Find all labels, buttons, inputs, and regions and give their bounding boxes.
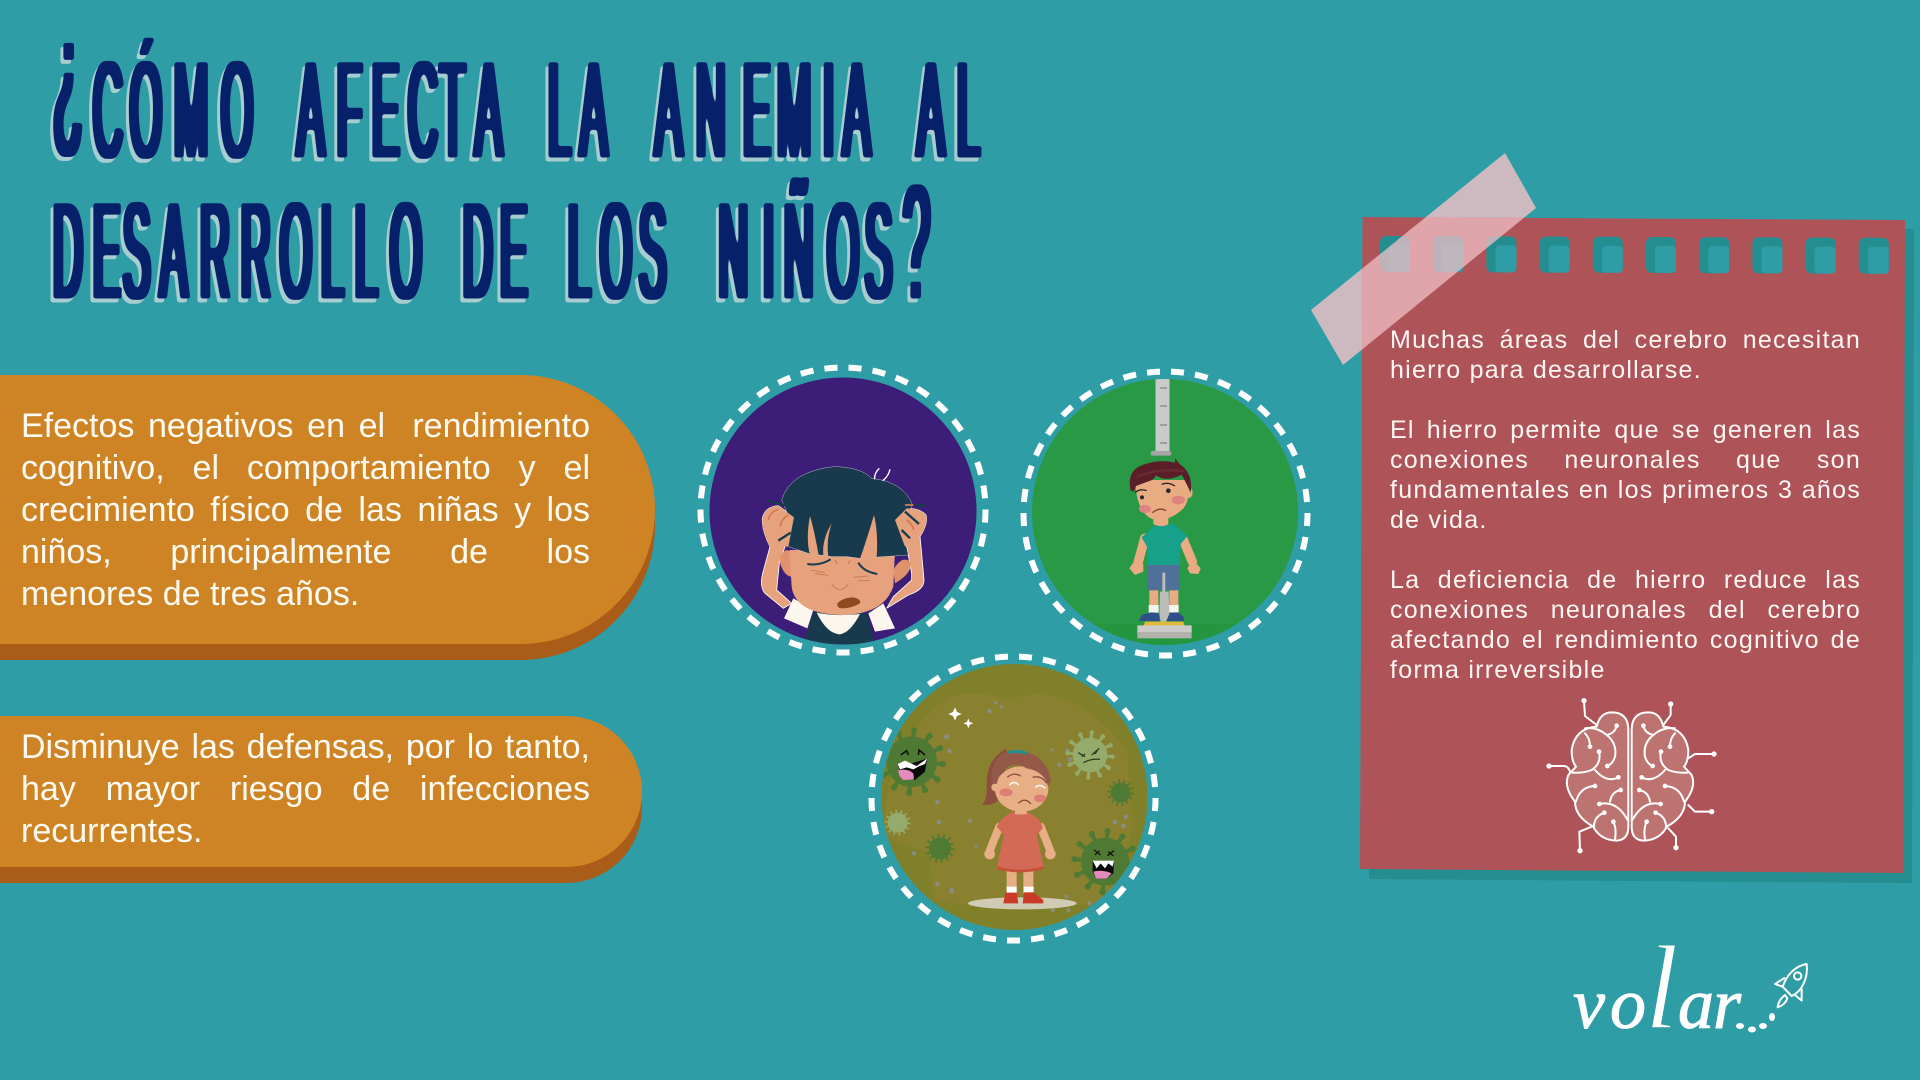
mouth bbox=[837, 597, 860, 608]
height ruler bbox=[1156, 375, 1170, 455]
text: nota bbox=[1390, 326, 1861, 684]
face bbox=[789, 550, 895, 615]
text: nota: fundamentales en los primeros 3 años bbox=[1390, 476, 1861, 504]
shorts bbox=[1147, 563, 1180, 590]
eyes bbox=[1009, 782, 1045, 788]
text: defensas: recurrentes. bbox=[21, 812, 202, 850]
tape: over paper bbox=[1311, 153, 1536, 365]
fringe bbox=[992, 751, 1051, 787]
panel: defensas bbox=[0, 716, 642, 867]
icon: cerebro bbox=[1546, 698, 1717, 854]
text: nota: El hierro permite que se generen las bbox=[1390, 416, 1861, 444]
left arm bbox=[761, 506, 793, 608]
neck bbox=[1015, 811, 1027, 814]
text: defensas: hay mayor riesgo de infecciones bbox=[21, 770, 590, 808]
shoes bbox=[1003, 893, 1043, 903]
title: CÓMO AFECTA LA ANEMIA AL bbox=[93, 34, 980, 187]
note shadow bbox=[1369, 227, 1914, 883]
hands bbox=[762, 506, 927, 547]
nose bbox=[832, 584, 848, 589]
text: efectos negativos: cognitivo, el comportamiento y el bbox=[21, 449, 590, 487]
shoes bbox=[1139, 612, 1184, 621]
text: efectos negativos: Efectos negativos en el rendimiento bbox=[21, 407, 590, 445]
sparkles bbox=[948, 707, 973, 728]
text: nota: hierro para desarrollarse. bbox=[1390, 356, 1702, 384]
right hemisphere bbox=[1632, 712, 1693, 841]
text: efectos negativos: crecimiento físico de las niñas y los bbox=[21, 491, 590, 529]
hair tie bbox=[1008, 751, 1027, 753]
left folds bbox=[1573, 726, 1628, 839]
virus: small dark left bbox=[928, 836, 952, 861]
collar bbox=[817, 613, 860, 634]
scale base bbox=[1137, 625, 1192, 633]
text: efectos negativos bbox=[21, 407, 590, 613]
shirt bbox=[1142, 523, 1187, 565]
text: efectos negativos: menores de tres años. bbox=[21, 575, 359, 613]
fringe cuts bbox=[808, 515, 877, 559]
socks bbox=[1007, 887, 1034, 893]
text: nota: Muchas áreas del cerebro necesitan bbox=[1390, 326, 1861, 354]
mouth bbox=[1018, 800, 1031, 804]
hands bbox=[984, 849, 995, 859]
hair spikes bbox=[767, 500, 925, 541]
illustration: niña y virus bbox=[868, 654, 1158, 944]
virus: big right bbox=[1074, 831, 1136, 892]
tape: outer part bbox=[1311, 153, 1536, 365]
socks bbox=[1149, 605, 1179, 613]
text: nota: conexiones neuronales que son bbox=[1390, 446, 1861, 474]
legs bbox=[1007, 870, 1033, 893]
dress bbox=[803, 612, 875, 644]
particles bbox=[912, 701, 1128, 912]
cheeks bbox=[1139, 505, 1151, 513]
panel: nota cerebro bbox=[1311, 153, 1914, 883]
icon: rocket bbox=[1775, 964, 1807, 1007]
panel: efectos negativos bbox=[0, 375, 655, 644]
eyebrows bbox=[1007, 774, 1047, 783]
note paper bbox=[1360, 217, 1905, 873]
title bbox=[50, 30, 982, 310]
text: nota: afectando el rendimiento cognitivo de bbox=[1390, 626, 1861, 654]
text: defensas bbox=[21, 728, 590, 850]
face bbox=[1135, 480, 1189, 520]
logo: volar bbox=[1573, 935, 1808, 1040]
text: nota: La deficiencia de hierro reduce las bbox=[1390, 566, 1861, 594]
ponytail bbox=[982, 748, 1007, 805]
stray hair bbox=[875, 468, 890, 481]
virus: small dark right bbox=[1110, 782, 1132, 804]
dress hem bbox=[997, 868, 1044, 871]
neck bbox=[1153, 517, 1168, 526]
left hemisphere bbox=[1567, 712, 1628, 841]
right arm bbox=[887, 508, 927, 608]
lighter background bbox=[883, 694, 1133, 908]
text: nota: forma irreversible bbox=[1390, 656, 1606, 684]
wrinkles bbox=[811, 560, 870, 581]
mouth bbox=[1152, 509, 1166, 513]
ears bbox=[991, 783, 999, 791]
scale top bbox=[1143, 622, 1185, 626]
circuit leads bbox=[1549, 701, 1714, 851]
illustration: niño en la báscula bbox=[1020, 368, 1310, 658]
scale pole bbox=[1159, 573, 1169, 622]
hair bbox=[1130, 458, 1191, 493]
virus: angry light bbox=[1067, 732, 1113, 778]
cheeks bbox=[999, 788, 1013, 796]
brows bbox=[1135, 483, 1175, 493]
circuit nodes bbox=[1546, 698, 1717, 853]
hair highlight bbox=[1137, 470, 1184, 477]
legs bbox=[1149, 588, 1178, 606]
sleeves bbox=[784, 598, 895, 632]
binder holes bbox=[1380, 236, 1889, 274]
virus: small light bbox=[887, 812, 908, 833]
virus: big left bbox=[880, 730, 943, 793]
fingers bbox=[768, 505, 917, 530]
text: nota: de vida. bbox=[1390, 506, 1488, 534]
arms bbox=[990, 827, 1050, 850]
ears bbox=[780, 550, 911, 583]
ear bbox=[1185, 487, 1193, 498]
head bbox=[995, 766, 1048, 812]
text: defensas: Disminuye las defensas, por lo tanto, bbox=[21, 728, 590, 766]
ruler head bbox=[1151, 451, 1171, 456]
right folds bbox=[1632, 726, 1687, 839]
hands bbox=[1129, 559, 1201, 575]
text: nota: conexiones neuronales del cerebro bbox=[1390, 596, 1861, 624]
eyes bbox=[807, 559, 877, 574]
floor shadow bbox=[968, 897, 1077, 909]
dots bbox=[1736, 1013, 1775, 1032]
text: efectos negativos: niños, principalmente de los bbox=[21, 533, 590, 571]
hair bbox=[782, 467, 913, 558]
eyes bbox=[1140, 495, 1144, 499]
dress bbox=[997, 812, 1044, 872]
arms bbox=[1138, 538, 1192, 562]
illustration: niño con dolor de cabeza bbox=[698, 364, 988, 656]
